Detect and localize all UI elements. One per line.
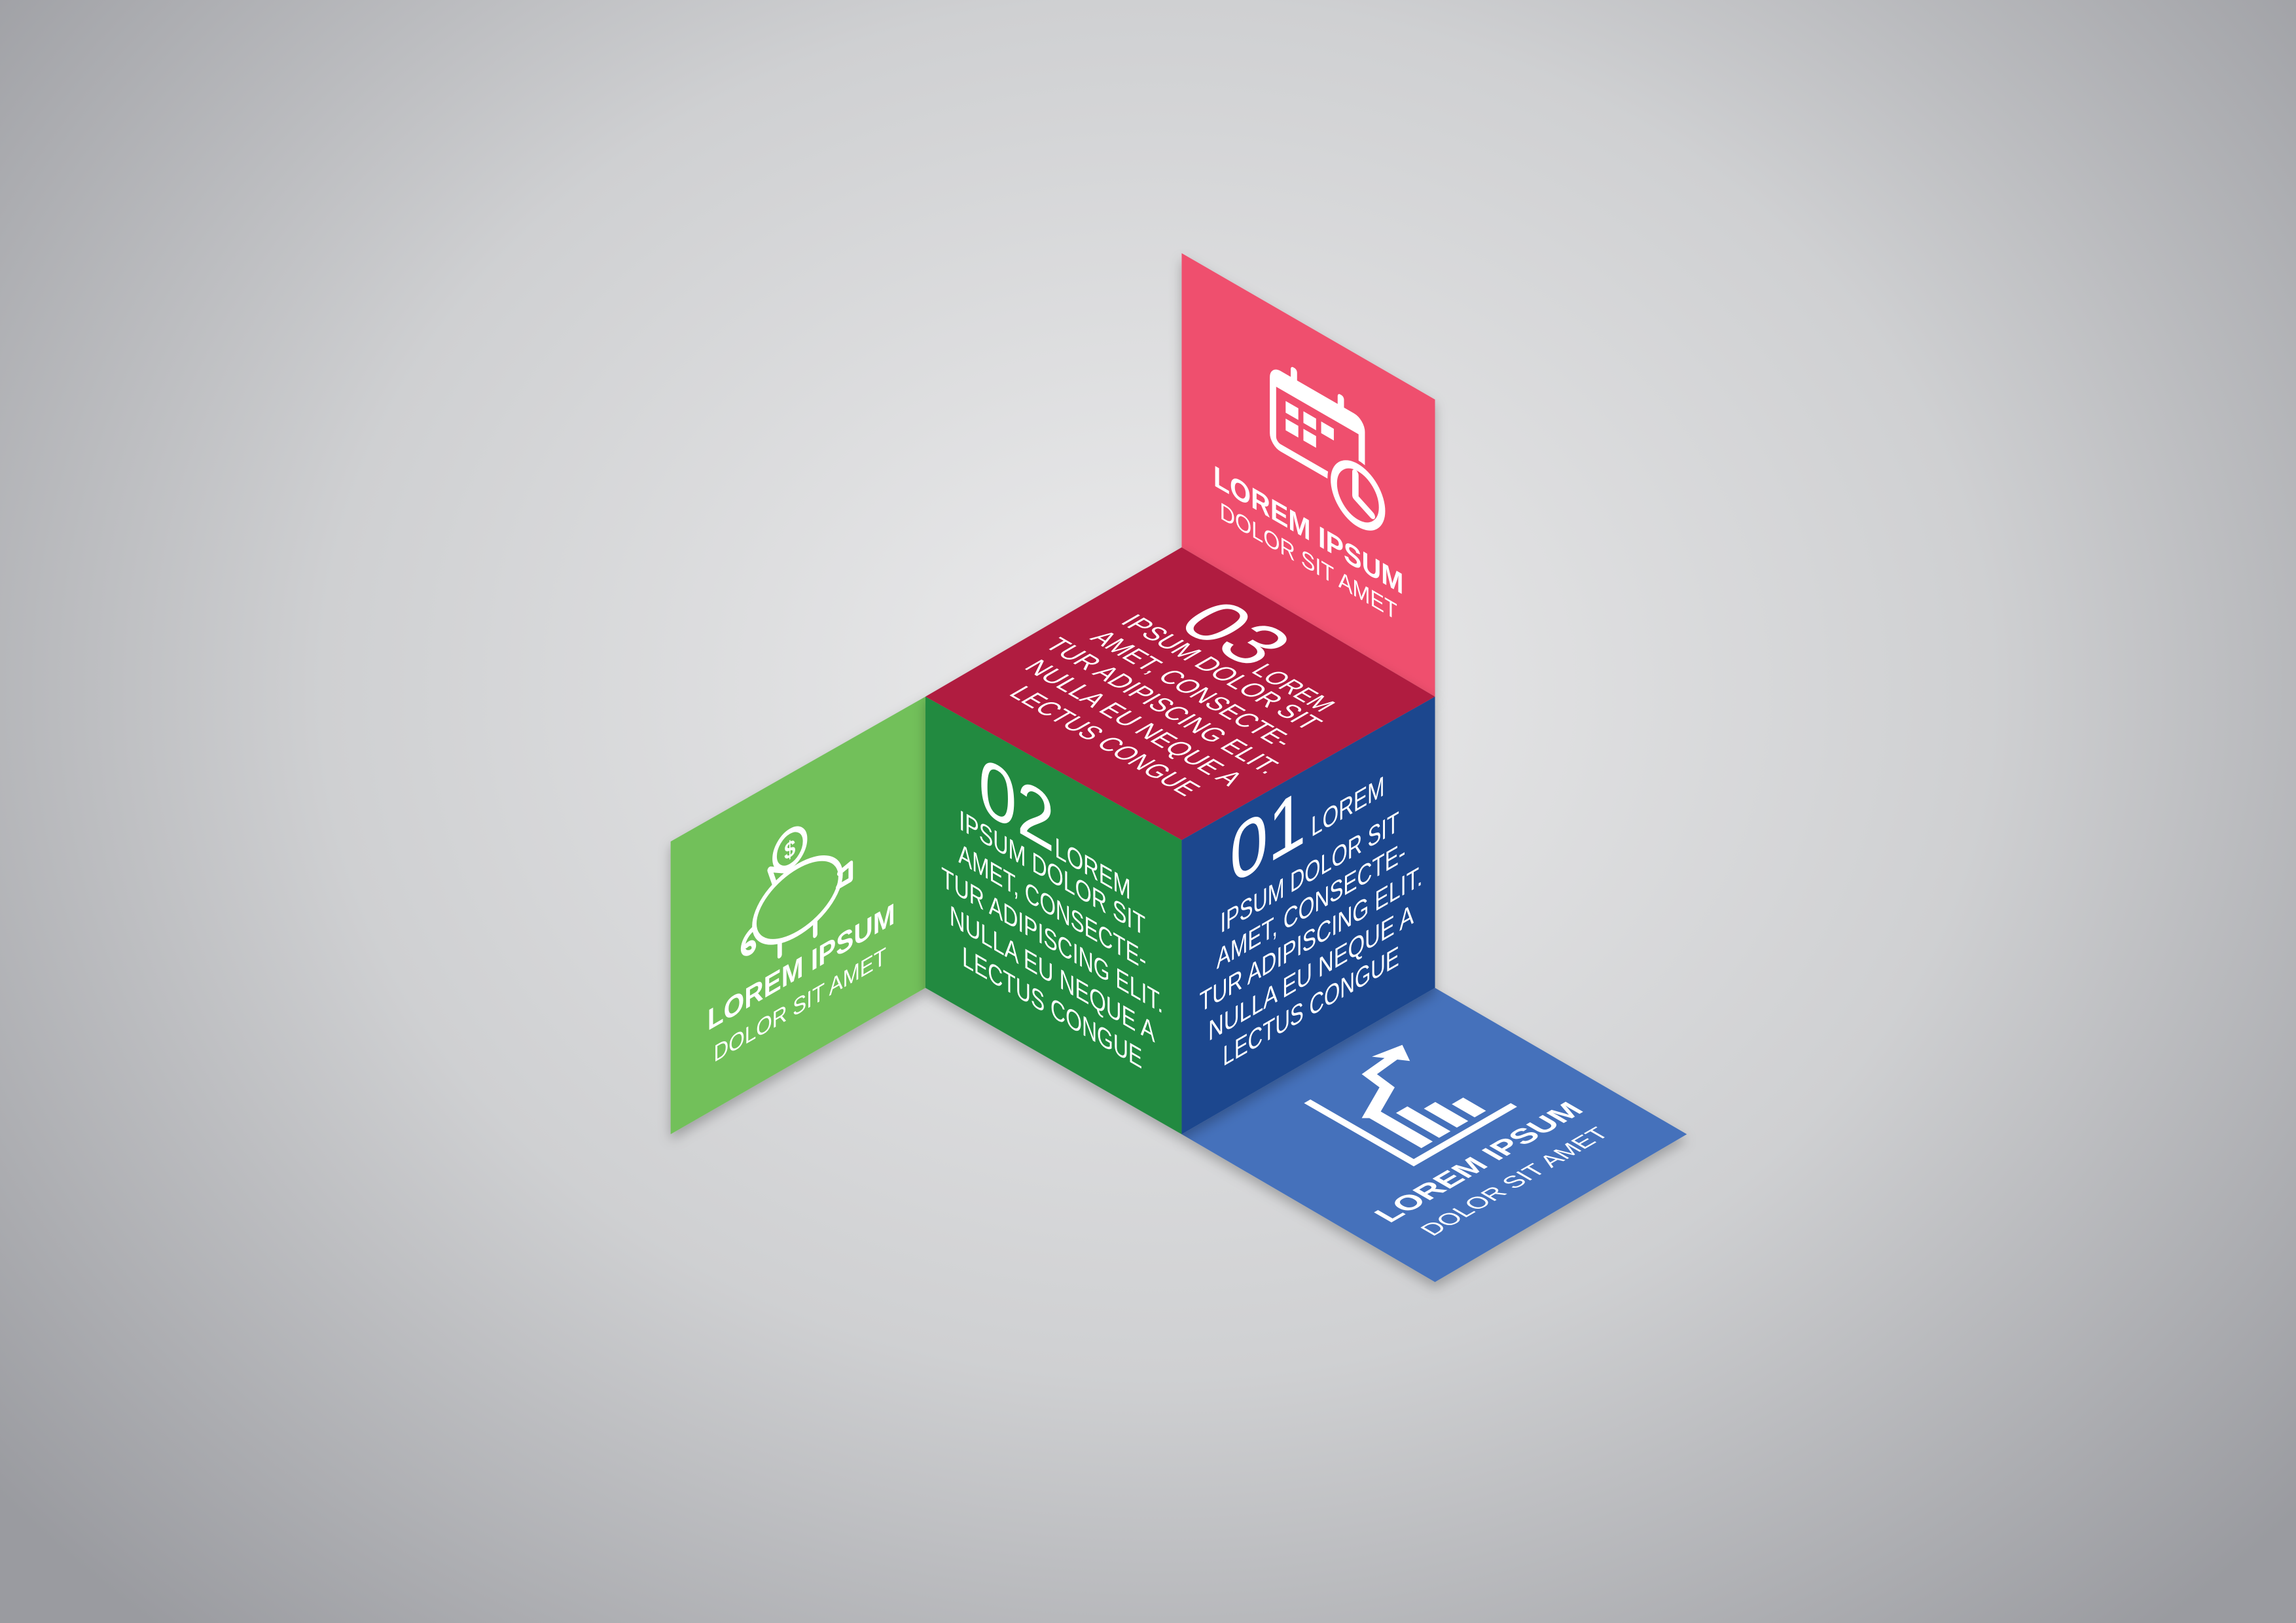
- cube right face 01: LOREM: [1311, 770, 1384, 844]
- cube left face 02: AMET, CONSECTE-: [958, 838, 1146, 977]
- cube left face 02: NULLA EU NEQUE A: [950, 900, 1155, 1050]
- cube left face 02: LOREM: [1055, 832, 1131, 906]
- panel: light green wall: [671, 696, 925, 1134]
- cube left face 02: TUR ADIPISCING ELIT.: [941, 861, 1163, 1020]
- heading: pink title: LOREM IPSUM: [1213, 459, 1404, 601]
- cube left face 02: LECTUS CONGUE: [962, 941, 1142, 1076]
- cube top face 03: LOREM: [1245, 660, 1342, 716]
- panel: blue floor: DOLOR SIT AMET: [1414, 1124, 1615, 1240]
- panel: pink wall: DOLOR SIT AMET: [1220, 497, 1397, 626]
- panel: pink wall: [1181, 253, 1435, 696]
- cube right face 01: NULLA EU NEQUE A: [1208, 899, 1414, 1048]
- cube top face 03: NULLA EU NEQUE A: [1018, 656, 1250, 790]
- panel: blue floor: [1181, 988, 1687, 1282]
- icon: piggy bank: $: [784, 833, 795, 866]
- cube top face 03: 03: [1159, 589, 1312, 677]
- cube top face 03: AMET, CONSECTE-: [1083, 627, 1300, 752]
- heading: wall title: LOREM IPSUM: [708, 897, 895, 1037]
- cube left face 02: 02: [978, 738, 1055, 870]
- cube right face 01: AMET, CONSECTE-: [1217, 836, 1405, 976]
- panel: cube: [925, 547, 1435, 1134]
- cube top face 03: LECTUS CONGUE: [1002, 683, 1206, 800]
- icon: calendar with clock: [1273, 355, 1388, 548]
- cube top face 03: TUR ADIPISCING ELIT.: [1038, 634, 1287, 778]
- cube top face 03: IPSUM DOLOR SIT: [1114, 611, 1328, 734]
- cube top face 03: [925, 547, 1435, 840]
- cube right face 01: TUR ADIPISCING ELIT.: [1200, 860, 1423, 1019]
- cube left face 02: [925, 696, 1181, 1134]
- cube left face 02: IPSUM DOLOR SIT: [959, 804, 1145, 943]
- cube right face 01: [1181, 696, 1435, 1134]
- panel: light green wall: DOLOR SIT AMET: [714, 942, 886, 1068]
- cube right face 01: IPSUM DOLOR SIT: [1221, 806, 1399, 940]
- icon: bar chart: [1301, 1040, 1514, 1163]
- cube right face 01: 01: [1230, 770, 1306, 902]
- icon: piggy bank: [743, 796, 851, 977]
- cube right face 01: LECTUS CONGUE: [1223, 940, 1399, 1073]
- heading: floor title: LOREM IPSUM: [1367, 1098, 1590, 1227]
